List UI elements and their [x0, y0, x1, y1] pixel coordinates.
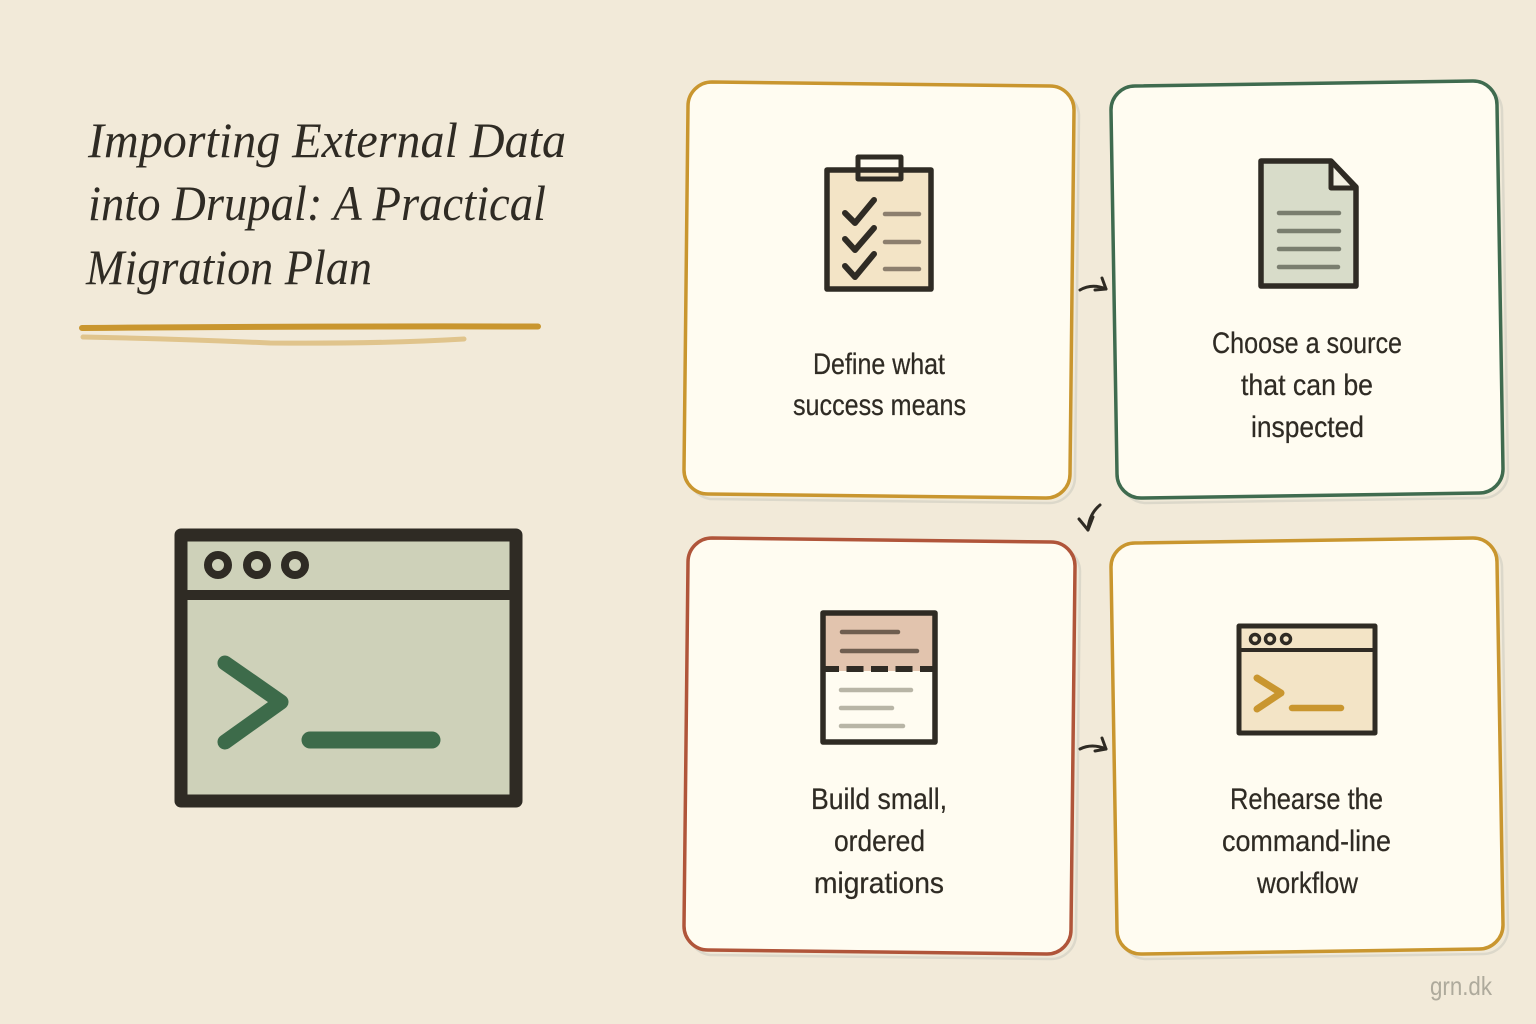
title: Importing External Data [87, 112, 566, 168]
card text: define success: Define what [813, 348, 946, 381]
title underline [82, 326, 538, 343]
arrow: define to source [1080, 278, 1106, 290]
arrow: build to rehearse [1080, 738, 1106, 751]
icon: small terminal window [1239, 626, 1375, 733]
card text: build small migrations: Build small, [811, 783, 947, 816]
card text: build small migrations: ordered [834, 825, 925, 858]
title: Migration Plan [85, 239, 372, 295]
panel: define success [684, 82, 1079, 503]
card text: define success: success means [793, 389, 966, 422]
card text: rehearse command line: workflow [1256, 867, 1358, 900]
panel: rehearse command line [1111, 538, 1508, 959]
card text: choose a source [1212, 327, 1402, 444]
watermark: grn.dk [1430, 971, 1493, 1001]
icon: large terminal window [181, 535, 516, 801]
title [85, 112, 566, 295]
icon: split document [822, 613, 935, 742]
panel: choose a source [1111, 81, 1508, 503]
card text: choose a source: that can be [1241, 369, 1373, 402]
card text: build small migrations [811, 783, 947, 900]
card text: define success [793, 348, 966, 422]
card text: build small migrations: migrations [814, 867, 944, 900]
icon: document [1261, 161, 1356, 286]
title: into Drupal: A Practical [88, 175, 546, 231]
card text: choose a source: inspected [1251, 411, 1364, 444]
arrow: source to build [1079, 505, 1100, 530]
icon: clipboard checklist [827, 157, 931, 289]
panel: build small migrations [684, 538, 1080, 959]
card text: rehearse command line: command-line [1222, 825, 1391, 858]
card text: choose a source: Choose a source [1212, 327, 1402, 360]
card text: rehearse command line: Rehearse the [1230, 783, 1383, 816]
card text: rehearse command line [1222, 783, 1391, 900]
